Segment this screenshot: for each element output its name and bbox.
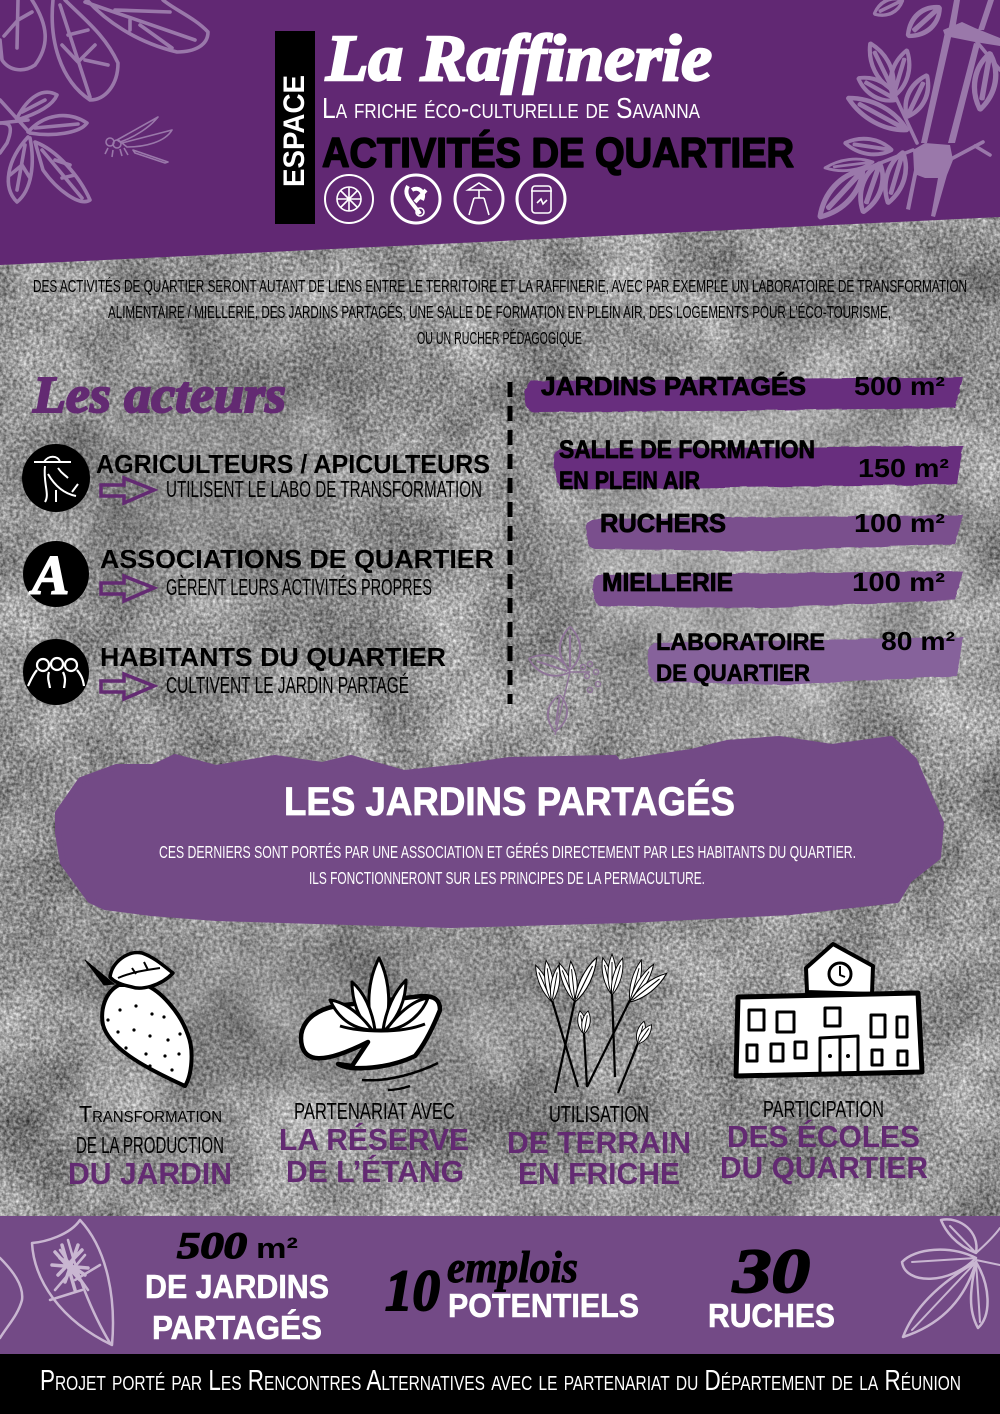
surface: laboratoire: 80 m² (881, 626, 955, 656)
stat: 30 ruches (708, 1238, 835, 1334)
dashed divider (508, 382, 512, 704)
section heading: ACTIVITÉS DE QUARTIER (322, 129, 794, 176)
espace label: ESPACE (278, 75, 311, 187)
stat: 500 m²: PARTAGÉS (152, 1309, 322, 1346)
stat: 10 emplois (385, 1243, 639, 1324)
stat: 500 m² (145, 1226, 329, 1346)
stat: 30 ruches: 30 (732, 1238, 810, 1306)
icon: citrus (325, 175, 373, 223)
header band (0, 0, 1000, 265)
stat: 500 m²: 500 (177, 1226, 247, 1267)
stat: 500 m²: DE JARDINS (145, 1268, 329, 1305)
leaves top left (0, 0, 208, 202)
icon: water lily (301, 958, 440, 1090)
icon: people (23, 639, 89, 705)
leaf: left (0, 1220, 113, 1345)
actor: agriculteurs: UTILISENT LE LABO DE TRANSFORMATION (166, 476, 482, 502)
actor: agriculteurs (22, 444, 490, 512)
icon: school (736, 944, 922, 1076)
actor: habitants: HABITANTS DU QUARTIER (100, 644, 446, 672)
actor: associations: ASSOCIATIONS DE QUARTIER (100, 546, 494, 574)
description: ILS FONCTIONNERONT SUR LES PRINCIPES DE LA PERMACULTURE. (309, 868, 705, 888)
surface: ruchers (586, 508, 963, 551)
intro text: OU UN RUCHER PÉDAGOGIQUE (417, 328, 582, 348)
surface: ruchers: 100 m² (854, 508, 945, 538)
icon: letter A: A (29, 545, 69, 607)
footer (0, 1354, 1000, 1414)
arrow (101, 674, 154, 699)
stat: 10 emplois: POTENTIELS (448, 1287, 639, 1324)
icon: letter A (23, 541, 89, 607)
intro text (33, 276, 967, 348)
description (159, 842, 856, 888)
caption: terrain (507, 1101, 691, 1191)
surface: laboratoire: LABORATOIRE (656, 629, 825, 656)
caption: terrain: UTILISATION (549, 1101, 649, 1127)
surface: jardins partagés (525, 371, 963, 412)
panel: les jardins partagés (58, 739, 941, 925)
dragonfly (105, 117, 172, 163)
surfaces list (525, 371, 963, 687)
caption: réserve: LA RÉSERVE (279, 1122, 469, 1157)
surface: jardins partagés: JARDINS PARTAGÉS (541, 371, 806, 401)
caption: production: DU JARDIN (68, 1156, 232, 1191)
surface: laboratoire: DE QUARTIER (656, 660, 810, 687)
icon: lemon (85, 953, 192, 1086)
subtitle: La friche éco-culturelle de Savanna (322, 93, 701, 125)
stat: 500 m²: m² (256, 1233, 298, 1265)
faded plant (526, 627, 600, 735)
caption: écoles: DU QUARTIER (720, 1150, 928, 1185)
surface: laboratoire (648, 626, 963, 687)
bottom key figures band (0, 1216, 1000, 1354)
title: La Raffinerie (325, 22, 712, 95)
bamboo top right (812, 0, 1000, 224)
espace label (275, 31, 315, 224)
surface: jardins partagés: 500 m² (854, 371, 945, 401)
actor: associations: GÈRENT LEURS ACTIVITÉS PROPRES (166, 574, 432, 600)
surface: salle de formation: EN PLEIN AIR (559, 467, 700, 495)
caption: réserve: PARTENARIAT AVEC (294, 1098, 455, 1124)
caption: production: Transformation (79, 1101, 222, 1127)
stat: 10 emplois: emplois (447, 1243, 578, 1292)
arrow (101, 478, 154, 503)
heading: les acteurs: Les acteurs (32, 367, 286, 424)
surface: salle de formation: 150 m² (858, 453, 949, 483)
icon: shelter (455, 175, 503, 223)
caption: écoles (720, 1096, 928, 1185)
actor: habitants (23, 639, 446, 705)
leaf: right (902, 1219, 1000, 1337)
caption: terrain: EN FRICHE (518, 1156, 680, 1191)
surface: salle de formation (554, 436, 963, 495)
actor: agriculteurs: AGRICULTEURS / APICULTEURS (96, 451, 490, 479)
stat: 30 ruches: RUCHES (708, 1297, 835, 1334)
actor: habitants: CULTIVENT LE JARDIN PARTAGÉ (166, 672, 409, 698)
icon: wheat (532, 954, 670, 1093)
header icons (325, 175, 565, 223)
caption: écoles: PARTICIPATION (763, 1096, 884, 1122)
surface: miellerie: 100 m² (852, 567, 945, 597)
surface: miellerie: MIELLERIE (602, 567, 733, 597)
caption: production: DE LA PRODUCTION (76, 1132, 224, 1158)
surface: miellerie (593, 567, 963, 608)
caption: terrain: DE TERRAIN (507, 1125, 691, 1160)
arrow (101, 576, 154, 601)
icon: jar (517, 175, 565, 223)
icon: farmer (22, 444, 90, 512)
surface: salle de formation: SALLE DE FORMATION (559, 436, 815, 464)
caption: écoles: DES ÉCOLES (727, 1119, 920, 1154)
surface: ruchers: RUCHERS (600, 508, 726, 538)
heading: LES JARDINS PARTAGÉS (284, 779, 735, 824)
actor: associations (23, 541, 494, 607)
caption: production (68, 1101, 232, 1191)
stat: 10 emplois: 10 (385, 1258, 440, 1323)
caption: réserve (279, 1098, 469, 1189)
caption: réserve: DE L’ÉTANG (286, 1154, 464, 1189)
icon: bee (392, 175, 440, 223)
